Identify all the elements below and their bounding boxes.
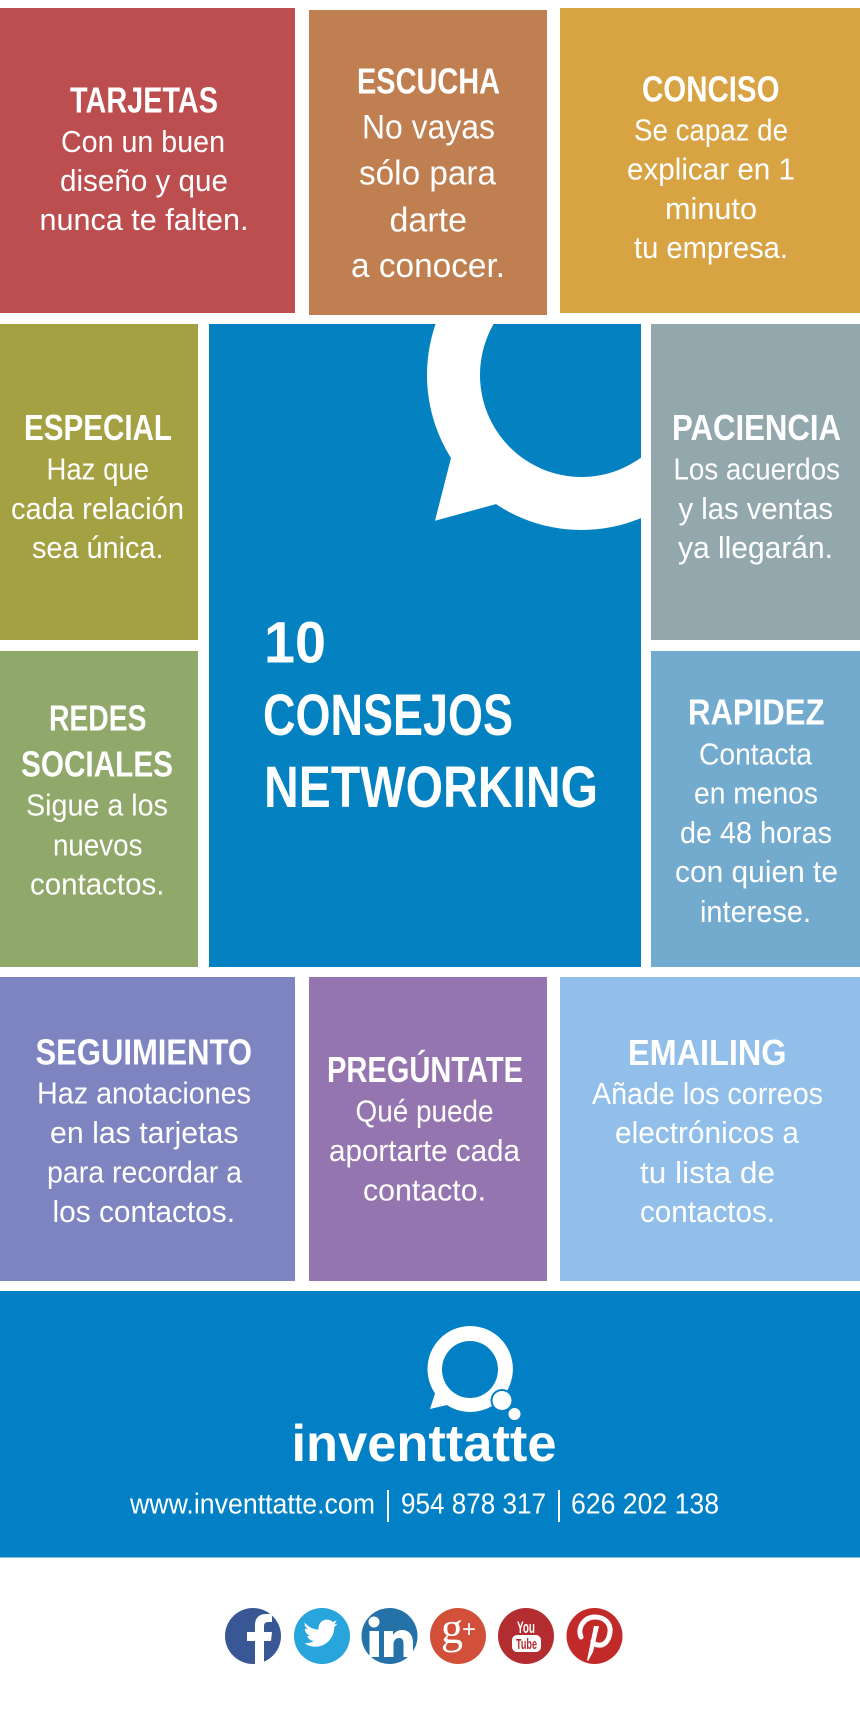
heading: tarjetas: TARJETAS [70, 80, 218, 120]
text: paciencia: ya llegarán. [678, 530, 833, 565]
text: conciso: tu empresa. [634, 230, 788, 265]
contact line: 626 202 138 [571, 1488, 719, 1520]
text: tarjetas: Con un buen [61, 124, 225, 159]
icon: twitter [294, 1608, 350, 1664]
text: paciencia: Los acuerdos [674, 452, 840, 486]
text: rapidez: con quien te [675, 854, 838, 889]
text: redes sociales: nuevos [53, 828, 142, 862]
heading: conciso: CONCISO [642, 68, 780, 110]
text: emailing [592, 1076, 823, 1229]
panel: footer band [0, 1291, 860, 1558]
contact line: 954 878 317 [401, 1488, 546, 1520]
text: conciso: explicar en 1 [627, 152, 795, 186]
panel: emailing [560, 977, 860, 1281]
icon: google plus: + [462, 1616, 476, 1643]
text: escucha: sólo para [359, 154, 496, 192]
text: rapidez: en menos [694, 776, 818, 810]
text: paciencia: y las ventas [678, 491, 833, 526]
panel: title [209, 324, 641, 967]
panel: redes sociales [0, 651, 198, 967]
text: seguimiento: en las tarjetas [50, 1115, 238, 1150]
icon: youtube: Tube [516, 1636, 537, 1653]
title text: NETWORKING [264, 755, 598, 820]
title text: 10 [264, 610, 326, 676]
text: redes sociales: Sigue a los [26, 788, 168, 822]
icon: google plus [430, 1604, 486, 1664]
text: conciso: Se capaz de [634, 112, 788, 148]
panel: seguimiento [0, 977, 295, 1281]
text: escucha: darte [390, 202, 467, 240]
heading: redes sociales: SOCIALES [21, 744, 173, 784]
panel: especial [0, 324, 198, 640]
heading: preguntate: PREGÚNTATE [327, 1048, 523, 1090]
heading: redes sociales [21, 698, 173, 784]
text: seguimiento: Haz anotaciones [37, 1076, 251, 1110]
text: rapidez: interese. [700, 894, 811, 929]
text: redes sociales [26, 788, 168, 902]
text: conciso [627, 112, 795, 265]
icon: google plus: g [441, 1604, 463, 1653]
text: emailing: tu lista de [640, 1155, 775, 1190]
text: escucha [351, 108, 505, 285]
text: tarjetas: diseño y que [60, 163, 228, 198]
panel: conciso [560, 8, 860, 313]
heading: emailing: EMAILING [628, 1032, 786, 1073]
social icons [225, 1604, 622, 1664]
text: emailing: electrónicos a [615, 1115, 800, 1150]
text: especial: cada relación [11, 491, 184, 526]
icon: speech bubble ring [427, 324, 641, 530]
text: seguimiento: para recordar a [47, 1154, 243, 1190]
panel: preguntate [309, 977, 547, 1281]
text: preguntate: aportarte cada [329, 1133, 521, 1168]
text: rapidez: Contacta [699, 736, 813, 772]
text: seguimiento [37, 1076, 251, 1229]
icon: youtube [498, 1608, 554, 1664]
text: escucha: No vayas [362, 108, 495, 146]
text: especial: sea única. [32, 530, 164, 565]
text: seguimiento: los contactos. [52, 1194, 235, 1229]
text: tarjetas: nunca te falten. [40, 202, 248, 237]
heading: seguimiento: SEGUIMIENTO [36, 1032, 252, 1072]
text: tarjetas [40, 124, 248, 237]
text: escucha: a conocer. [351, 247, 505, 285]
contact line: www.inventtatte.com [129, 1488, 375, 1520]
logo wordmark: inventtatte [292, 1415, 556, 1473]
icon: linkedin [362, 1608, 418, 1664]
title text [263, 610, 598, 820]
text: rapidez: de 48 horas [680, 815, 832, 850]
panel: tarjetas [0, 8, 295, 313]
title text: CONSEJOS [263, 683, 513, 748]
heading: escucha: ESCUCHA [357, 60, 500, 102]
heading: especial: ESPECIAL [24, 407, 172, 448]
text: emailing: contactos. [640, 1194, 775, 1229]
panel: rapidez [651, 651, 860, 967]
text: emailing: Añade los correos [592, 1076, 823, 1111]
icon: facebook [225, 1608, 281, 1664]
text: preguntate [329, 1094, 521, 1208]
panel: paciencia [651, 324, 860, 640]
text: conciso: minuto [665, 191, 757, 226]
text: especial: Haz que [46, 452, 149, 486]
heading: rapidez: RAPIDEZ [688, 692, 824, 732]
heading: redes sociales: REDES [49, 698, 146, 738]
text: paciencia [674, 452, 840, 565]
panel: escucha [309, 10, 547, 315]
icon: logo bubble [428, 1326, 520, 1420]
icon: youtube: You [517, 1618, 535, 1637]
text: preguntate: contacto. [363, 1172, 486, 1208]
text: rapidez [675, 736, 838, 929]
text: redes sociales: contactos. [30, 866, 164, 902]
contact line [129, 1488, 719, 1522]
text: preguntate: Qué puede [356, 1094, 494, 1128]
icon: pinterest [566, 1608, 622, 1664]
text: especial [11, 452, 184, 565]
